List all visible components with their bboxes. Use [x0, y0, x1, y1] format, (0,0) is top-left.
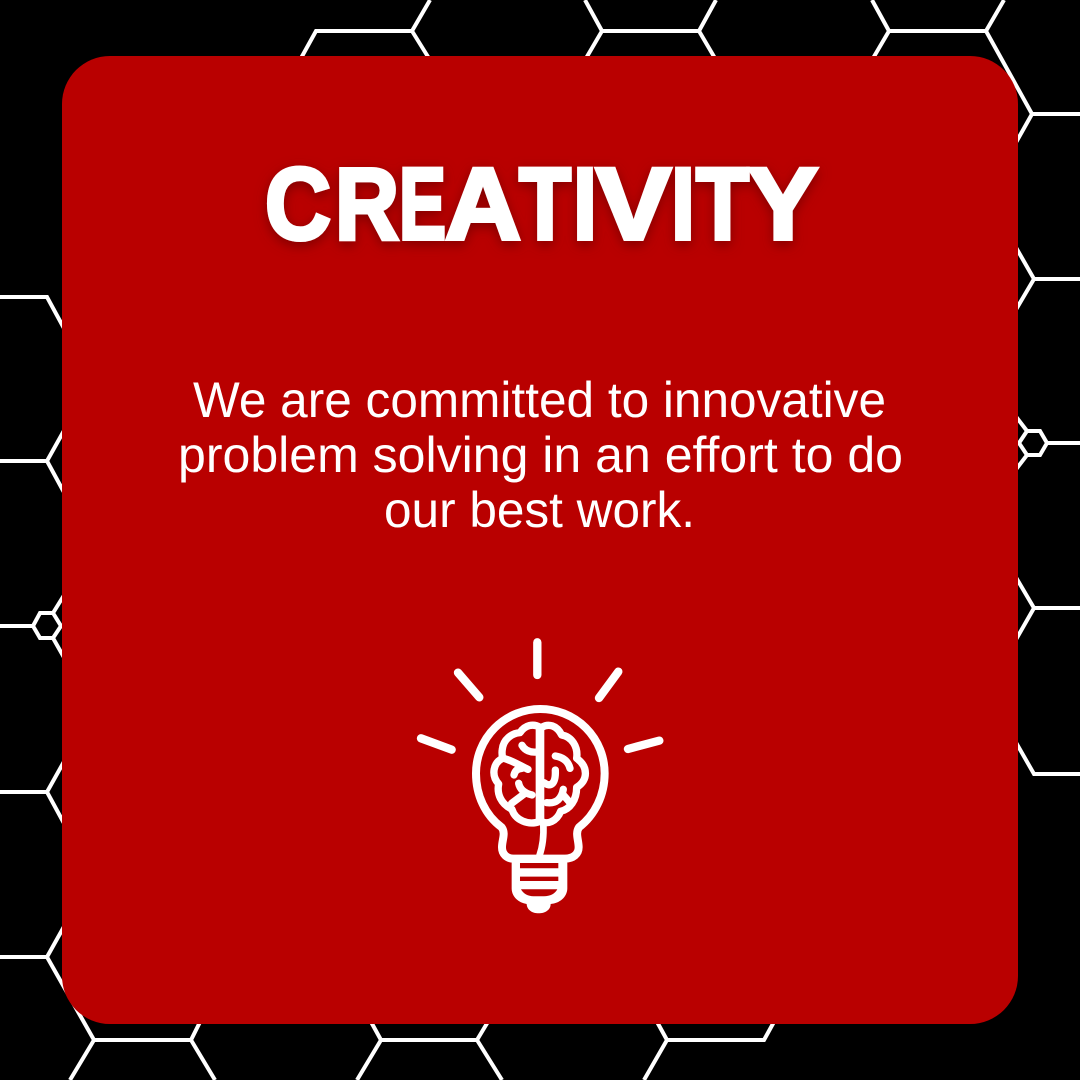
text block: description: We are committed to innovative: [193, 372, 886, 428]
text block: description: problem solving in an effort to do: [178, 427, 903, 483]
icon part: brain: [494, 725, 585, 823]
title: A: [445, 147, 521, 261]
title: T: [519, 147, 571, 261]
title: I: [671, 147, 695, 261]
title: I: [573, 147, 597, 261]
title: C: [265, 147, 331, 261]
text block: description: our best work.: [384, 482, 695, 538]
icon part: rays: [421, 642, 659, 750]
text block: description: [178, 372, 903, 538]
icon part: brain stem: [539, 824, 543, 856]
title: T: [696, 147, 749, 261]
title: E: [399, 147, 446, 261]
icon part: bulb outline: [476, 709, 605, 859]
title: Y: [748, 147, 818, 261]
panel: red rounded card: [62, 56, 1018, 1024]
title: V: [596, 147, 671, 261]
icon part: screw base: [512, 861, 567, 913]
icon: light bulb with brain and rays: [421, 642, 659, 913]
title: R: [335, 147, 399, 261]
